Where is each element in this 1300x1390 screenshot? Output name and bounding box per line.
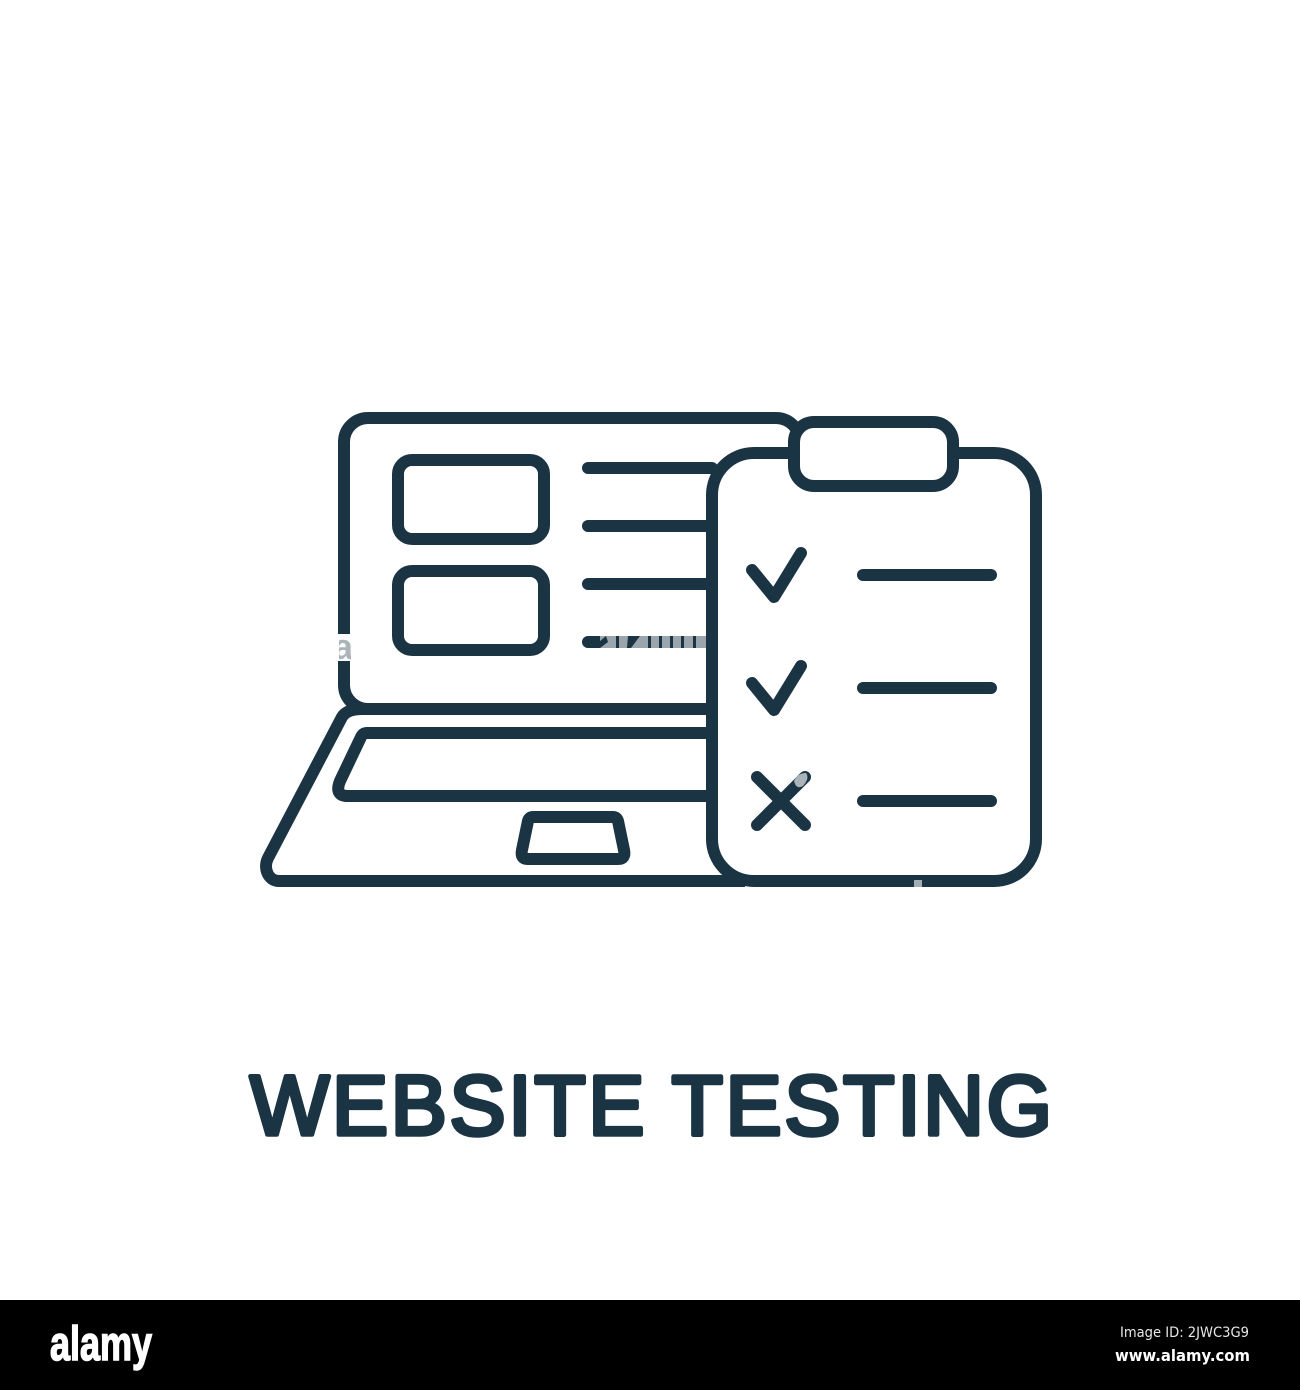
checklist line 2 — [863, 682, 991, 694]
clipboard board — [712, 453, 1036, 881]
laptop screen — [344, 418, 800, 709]
image id: Image ID: 2JWC3G9 — [1120, 1325, 1249, 1341]
watermark fragment on fourth line — [592, 636, 706, 648]
watermark fragment on screen edge: a — [333, 626, 354, 667]
watermark fragment on cross — [794, 773, 807, 787]
laptop trackpad — [522, 817, 624, 859]
cross mark — [757, 777, 805, 825]
watermark fragment on bottom edge — [914, 880, 922, 887]
icon: website testing — [266, 418, 1036, 887]
watermark fragment on screen edge — [338, 634, 351, 661]
checklist line 3 — [863, 795, 991, 807]
check mark 1 — [752, 553, 801, 597]
checklist line 1 — [863, 569, 991, 581]
screen content block 1 — [398, 460, 544, 539]
website url: www.alamy.com — [1115, 1346, 1250, 1365]
title: WEBSITE TESTING — [250, 1058, 1052, 1152]
screen text lines — [588, 468, 712, 642]
icon: laptop — [266, 418, 800, 881]
laptop keyboard — [338, 733, 712, 796]
icon: clipboard — [712, 422, 1036, 887]
laptop base — [266, 709, 745, 881]
infographic canvas — [0, 412, 1300, 1390]
footer bar — [0, 1300, 1300, 1390]
check mark 2 — [752, 666, 801, 710]
footer logo: alamy — [50, 1318, 152, 1371]
screen content block 2 — [398, 571, 544, 650]
clipboard clip — [794, 422, 953, 486]
